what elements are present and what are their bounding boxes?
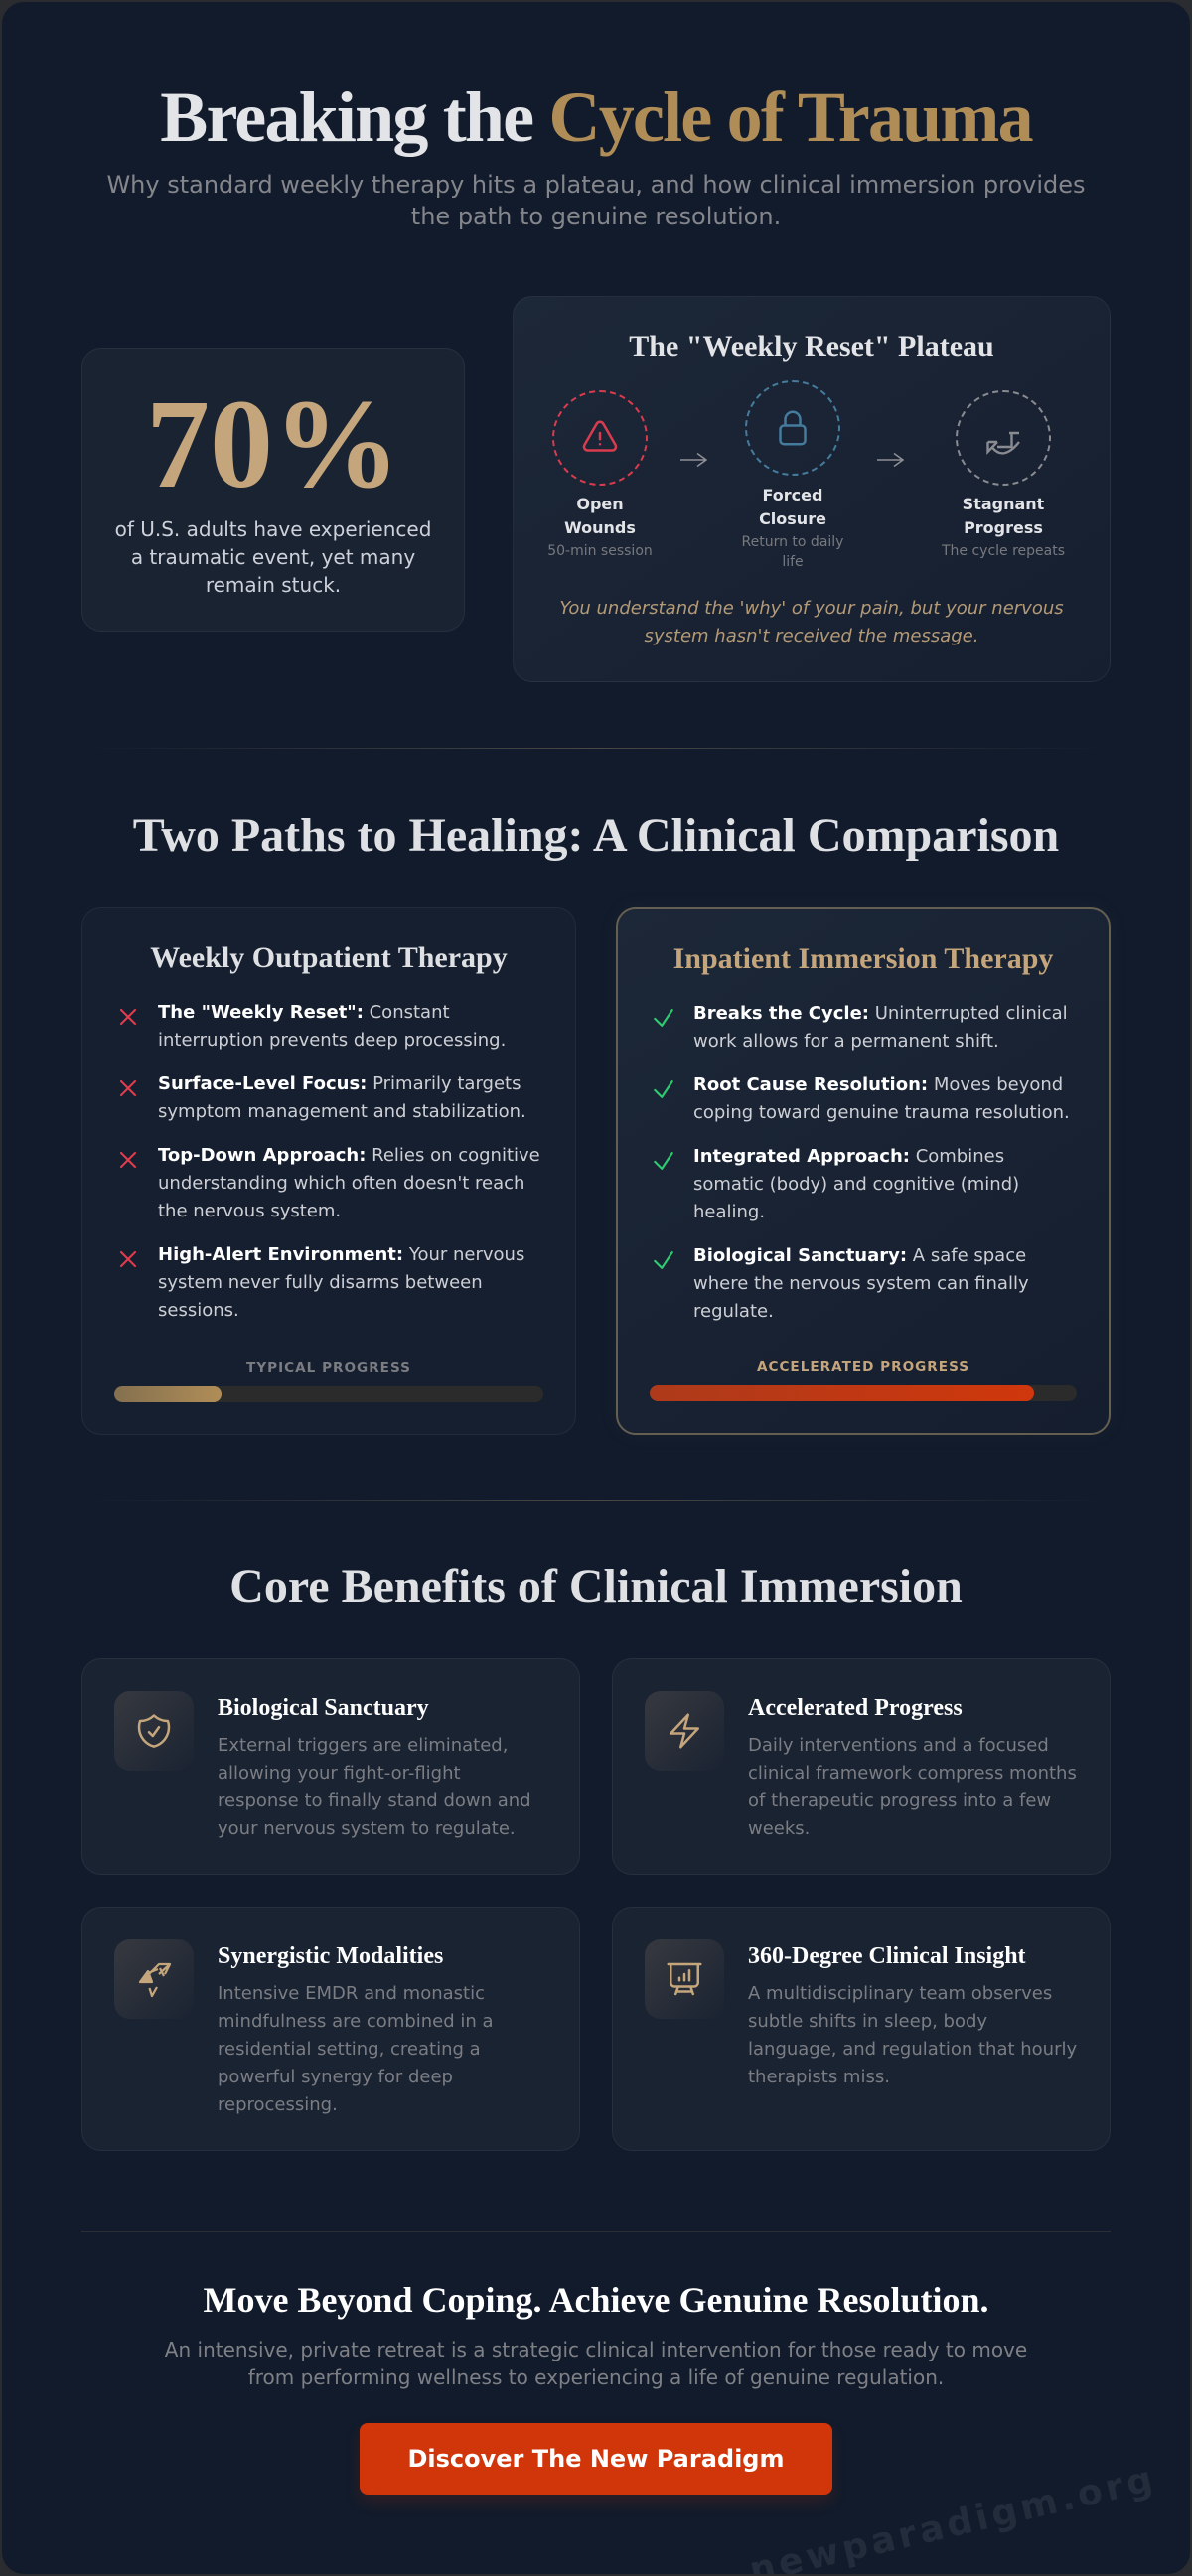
stat description: remain stuck. xyxy=(206,573,341,597)
progress bar xyxy=(650,1385,1077,1401)
icon: lock xyxy=(745,380,840,476)
step label: Stagnant xyxy=(963,495,1044,513)
step label: Forced xyxy=(763,486,822,504)
benefit description: language, and regulation that hourly xyxy=(748,2039,1077,2060)
call to action button xyxy=(360,2423,832,2495)
feature text: healing. xyxy=(693,1202,765,1222)
icon: check xyxy=(654,1251,673,1269)
panel: synergistic modalities benefit xyxy=(81,1907,580,2151)
feature text: interruption prevents deep processing. xyxy=(158,1030,506,1051)
feature text: sessions. xyxy=(158,1300,239,1321)
benefit description: powerful synergy for deep xyxy=(218,2067,453,2087)
title: Breaking the Cycle of Trauma xyxy=(160,77,1032,157)
divider xyxy=(81,1500,1111,1501)
step: open wounds xyxy=(547,390,653,559)
benefit description: response to finally stand down and xyxy=(218,1790,531,1811)
step note xyxy=(742,534,843,570)
panel: weekly outpatient therapy xyxy=(81,907,576,1435)
feature text: Surface-Level Focus: Primarily targets xyxy=(158,1073,521,1094)
feature text: regulate. xyxy=(693,1301,774,1322)
plateau takeaway quote: system hasn't received the message. xyxy=(645,626,978,646)
icon: warning triangle xyxy=(552,390,648,486)
benefit description: External triggers are eliminated, xyxy=(218,1735,508,1756)
feature: top-down approach xyxy=(119,1145,540,1221)
call to action text: from performing wellness to experiencing a life of genuine regulation. xyxy=(248,2365,944,2389)
benefit description: of therapeutic progress into a few xyxy=(748,1790,1051,1811)
benefit description: Intensive EMDR and monastic xyxy=(218,1983,485,2004)
benefit description: subtle shifts in sleep, body xyxy=(748,2011,987,2032)
step note: life xyxy=(782,554,804,570)
step label xyxy=(759,486,826,528)
benefit title: 360-Degree Clinical Insight xyxy=(748,1943,1026,1969)
benefit description: reprocessing. xyxy=(218,2094,338,2115)
step note: 50-min session xyxy=(547,543,653,559)
feature text: Top-Down Approach: Relies on cognitive xyxy=(158,1145,540,1166)
icon: presentation chart xyxy=(645,1939,724,2019)
feature text xyxy=(158,1073,526,1122)
plateau takeaway quote: You understand the 'why' of your pain, but your nervous xyxy=(559,598,1064,619)
benefit description xyxy=(748,1735,1077,1839)
benefit title: Accelerated Progress xyxy=(748,1695,963,1721)
plateau takeaway quote xyxy=(559,598,1064,646)
icon: cross xyxy=(119,1009,137,1025)
feature text: Breaks the Cycle: Uninterrupted clinical xyxy=(693,1003,1068,1024)
feature text: High-Alert Environment: Your nervous xyxy=(158,1244,524,1265)
step label: Closure xyxy=(759,509,826,528)
feature text: The "Weekly Reset": Constant xyxy=(158,1002,450,1023)
feature text: symptom management and stabilization. xyxy=(158,1101,526,1122)
step label xyxy=(564,495,636,537)
feature: weekly reset xyxy=(119,1002,506,1051)
stat description: of U.S. adults have experienced xyxy=(115,517,431,541)
icon: stalled return arrow xyxy=(956,390,1051,486)
step label: Progress xyxy=(964,518,1043,537)
benefit title: Biological Sanctuary xyxy=(218,1695,429,1721)
benefit description xyxy=(218,1983,494,2115)
section heading: two paths: Two Paths to Healing: A Clinical Comparison xyxy=(133,809,1059,862)
step label xyxy=(963,495,1044,537)
call to action text xyxy=(0,2336,1192,2391)
benefit description: Daily interventions and a focused xyxy=(748,1735,1049,1756)
feature: high-alert environment xyxy=(119,1244,524,1321)
divider xyxy=(81,748,1111,749)
step label: Open xyxy=(576,495,624,513)
benefit description: therapists miss. xyxy=(748,2067,890,2087)
feature: breaks the cycle xyxy=(654,1003,1068,1052)
benefit description: clinical framework compress months xyxy=(748,1763,1077,1784)
benefit description: mindfulness are combined in a xyxy=(218,2011,494,2032)
panel: clinical insight benefit xyxy=(612,1907,1111,2151)
benefit description: weeks. xyxy=(748,1818,810,1839)
column heading: Weekly Outpatient Therapy xyxy=(150,941,508,974)
icon: cross xyxy=(119,1080,137,1096)
divider xyxy=(81,2231,1111,2232)
arrow xyxy=(877,453,904,467)
arrow xyxy=(680,453,707,467)
feature text: Root Cause Resolution: Moves beyond xyxy=(693,1074,1063,1095)
subtitle xyxy=(106,171,1086,230)
step note: The cycle repeats xyxy=(942,543,1065,559)
feature text: Biological Sanctuary: A safe space xyxy=(693,1245,1026,1266)
feature text xyxy=(693,1003,1068,1052)
subtitle: Why standard weekly therapy hits a plateau, and how clinical immersion provides xyxy=(106,171,1086,199)
step: stagnant progress xyxy=(942,390,1065,559)
icon: cross xyxy=(119,1152,137,1168)
panel: inpatient immersion therapy xyxy=(616,907,1111,1435)
icon: shield check xyxy=(114,1691,194,1771)
icon: synergy arrows xyxy=(114,1939,194,2019)
feature text xyxy=(693,1245,1029,1322)
feature text xyxy=(158,1002,506,1051)
feature text: work allows for a permanent shift. xyxy=(693,1031,999,1052)
icon: check xyxy=(654,1009,673,1027)
step: forced closure xyxy=(742,380,843,570)
icon: check xyxy=(654,1152,673,1170)
feature: biological sanctuary xyxy=(654,1245,1029,1322)
subtitle: the path to genuine resolution. xyxy=(411,203,781,230)
icon: cross xyxy=(119,1251,137,1267)
panel: accelerated progress benefit xyxy=(612,1658,1111,1875)
icon: lightning bolt xyxy=(645,1691,724,1771)
plateau heading: The "Weekly Reset" Plateau xyxy=(629,330,994,362)
feature text: somatic (body) and cognitive (mind) xyxy=(693,1174,1019,1195)
progress bar xyxy=(114,1386,543,1402)
feature text xyxy=(158,1244,524,1321)
benefit description: your nervous system to regulate. xyxy=(218,1818,516,1839)
benefit description: A multidisciplinary team observes xyxy=(748,1983,1052,2004)
feature: integrated approach xyxy=(654,1146,1019,1222)
stat description: a traumatic event, yet many xyxy=(131,545,415,569)
stat number: 70% xyxy=(146,373,400,514)
step label: Wounds xyxy=(564,518,636,537)
feature: root cause resolution xyxy=(654,1074,1070,1123)
panel: weekly reset plateau xyxy=(513,296,1111,682)
feature text xyxy=(693,1074,1070,1123)
call to action heading: Move Beyond Coping. Achieve Genuine Resolution. xyxy=(203,2280,989,2320)
section heading: core benefits: Core Benefits of Clinical Immersion xyxy=(229,1560,963,1613)
call to action button: Discover The New Paradigm xyxy=(407,2445,785,2473)
benefit description: residential setting, creating a xyxy=(218,2039,481,2060)
progress label: ACCELERATED PROGRESS xyxy=(757,1360,969,1375)
progress label: TYPICAL PROGRESS xyxy=(246,1360,411,1376)
benefit description xyxy=(748,1980,1077,2091)
benefit description xyxy=(218,1735,531,1839)
stat description xyxy=(115,517,431,597)
benefit description: allowing your fight-or-flight xyxy=(218,1763,461,1784)
feature text: coping toward genuine trauma resolution. xyxy=(693,1102,1070,1123)
column heading: Inpatient Immersion Therapy xyxy=(673,942,1053,975)
feature text: system never fully disarms between xyxy=(158,1272,483,1293)
feature: surface-level focus xyxy=(119,1073,526,1122)
icon: check xyxy=(654,1080,673,1098)
step note: Return to daily xyxy=(742,534,843,550)
panel: biological sanctuary benefit xyxy=(81,1658,580,1875)
feature text: the nervous system. xyxy=(158,1201,341,1221)
feature text: understanding which often doesn't reach xyxy=(158,1173,524,1194)
benefit title: Synergistic Modalities xyxy=(218,1943,443,1969)
panel: 70% statistic xyxy=(81,348,465,632)
call to action text: An intensive, private retreat is a strategic clinical intervention for those ready to move xyxy=(165,2338,1027,2361)
feature text: Integrated Approach: Combines xyxy=(693,1146,1004,1167)
feature text xyxy=(693,1146,1019,1222)
feature text: where the nervous system can finally xyxy=(693,1273,1029,1294)
feature text xyxy=(158,1145,540,1221)
